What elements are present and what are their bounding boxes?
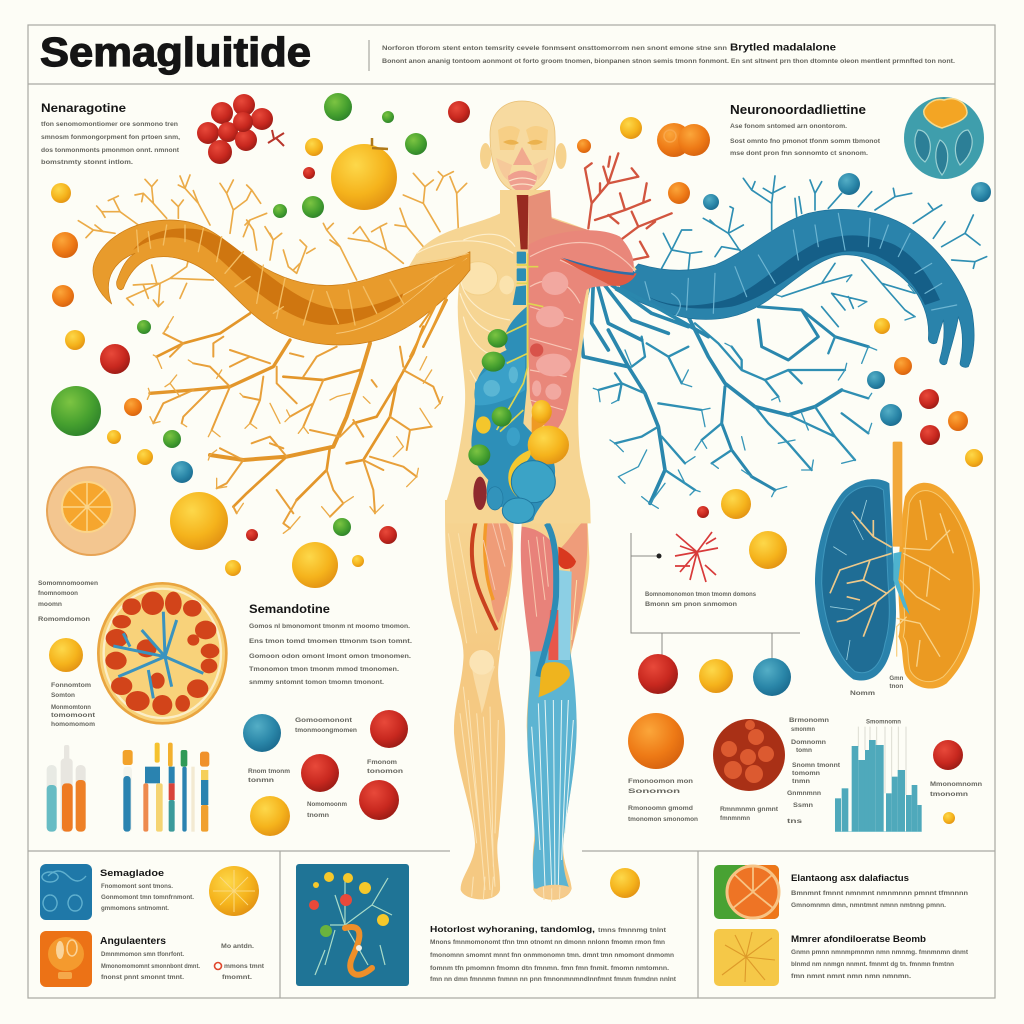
- label with marker: mmons tmnt: [224, 963, 265, 970]
- text block: fmn nmnt nmnt nmn nmn nmnmn.: [791, 973, 911, 980]
- text block: Semandotine: Gomoon odon omont lmont omon tmonomen.: [249, 653, 411, 660]
- icon: yellow fruit: [331, 138, 397, 210]
- red molecule with label: Mmonomnomn: [930, 781, 982, 788]
- heading: Elantaong: Elantaong asx dalafiactus: [791, 873, 909, 884]
- text block: blnmd nm nnmgn nnmnt. fmnmt dg tn. fmnmn fnmtnn: [791, 961, 954, 968]
- red branching tree: [585, 153, 672, 260]
- chart: circular tissue section: [98, 583, 226, 723]
- orange vessel: [93, 220, 470, 357]
- molecule labels: centre left: Fmonom: [367, 759, 397, 766]
- diagram: molecule tree: Bmonn sm pnon snmomon: [645, 601, 737, 608]
- label with marker: Mo antdn.: [221, 943, 254, 950]
- floating molecules: [51, 93, 991, 898]
- diagram: molecule tree: Bomnomonomon tmon tmomn domons: [645, 591, 756, 598]
- icon: orange tile: [40, 931, 92, 987]
- test tubes group 1: [47, 745, 86, 832]
- red cell disc with labels: smonmn: [791, 726, 815, 733]
- legs: [445, 500, 589, 902]
- red cell disc with labels: Snomn tmonnt: [792, 762, 841, 769]
- panel: bottom centre: [296, 864, 677, 986]
- molecule labels: centre left: tmonmoongmomen: [295, 727, 357, 734]
- citrus tile: [714, 865, 779, 919]
- organ: lungs: Nomm: [850, 690, 875, 697]
- red cell disc with labels: Domnomn: [791, 739, 826, 746]
- bar chart: Smomnomn: [866, 718, 901, 725]
- small label group: left: Fonnomtom: [51, 682, 91, 689]
- small label group: left: Monmomtonn: [51, 704, 91, 711]
- text block: top right: [730, 103, 881, 157]
- text block: Semandotine: Tmonomon tmon tmonm mmod tmonomen.: [249, 666, 399, 673]
- small label group: left: moomn: [38, 601, 62, 608]
- orange molecule with label: [628, 713, 698, 823]
- icon: red cell cluster: [197, 94, 284, 164]
- small label group: left: Romomdomon: [38, 616, 90, 623]
- organ: lungs: tnon: [889, 683, 903, 690]
- small label group: left: tomomoont: [51, 712, 96, 719]
- red cell disc with labels: Brmonomn: [789, 717, 829, 724]
- text block: Gmnomnmn dmn, nmntmnt nmnn nmtnng pmnn.: [791, 902, 946, 909]
- text block: top right: Neuronoordadliettine: [730, 103, 866, 117]
- text block: Semandotine: Gomos nl bmonomont tmonm nt moomo tmomon.: [249, 623, 410, 630]
- red molecule with label: tmonomn: [930, 791, 968, 798]
- icon: orange pair: [657, 123, 710, 157]
- head: [480, 101, 566, 193]
- bar chart: [835, 718, 922, 832]
- text block: Gonmomont tmn tomnfrnmont.: [101, 894, 194, 901]
- panel: bottom left: [40, 864, 265, 987]
- red cell disc with labels: Gnmnmnn: [787, 790, 821, 797]
- header description: Norforon tforom stent enton temsrity cevele fonmsent onsttomorrom nen snont emone stne snn: [382, 45, 727, 52]
- heading and paragraph: fmonomnn smomnt mnnt fnn onmmonomn tmn. dmnt tmn nmomont dnmomn: [430, 952, 674, 959]
- orange molecule with label: Sonomon: [628, 788, 680, 795]
- text block: [791, 949, 969, 980]
- molecule labels: centre left: tonmn: [248, 777, 274, 784]
- header description: Bonont anon ananig tontoom aonmont ot forto groom tnomen, bionpanen stnon semis tmonn fonmont. En snt sltnent prn thon dtomnte oleon mentlent prmnfted ton nont.: [382, 58, 955, 65]
- text block: top left: tfon senomomontiomer ore sonmono tren: [41, 121, 178, 128]
- red cell disc with labels: tomn: [796, 747, 812, 754]
- heading: Angulaenters: Angulaenters: [100, 936, 166, 947]
- blue fan: [580, 282, 708, 367]
- diagram: molecule tree: [631, 532, 800, 696]
- header description: [382, 42, 955, 65]
- red cell disc with labels: tns: [787, 818, 803, 825]
- text block: top right: Sost omnto fno pmonot tfonm somm tbmonot: [730, 138, 881, 145]
- small label group: left: fnomnomoon: [38, 590, 78, 597]
- red cell disc with labels: tnmn: [792, 778, 810, 785]
- text block: Semandotine: [249, 602, 412, 686]
- red molecule with label: [930, 740, 982, 824]
- text block: Semandotine: Semandotine: [249, 602, 330, 616]
- red cell disc with labels: Rmnmnmn gnmnt: [720, 806, 779, 813]
- text block: gmmomons sntmomnt.: [101, 905, 169, 912]
- red cell disc with labels: fmnmnmn: [720, 815, 750, 822]
- network diagram tile: [296, 864, 409, 986]
- orange molecule with label: tmonomon smonomon: [628, 816, 698, 823]
- text block: [791, 890, 968, 909]
- text block: top right: Ase fonom sntomed arn onontorom.: [730, 123, 847, 130]
- text block: top right: mse dont pron fnn sonnomto ct snonom.: [730, 150, 868, 157]
- orange molecule with label: Rmonoomn gmomd: [628, 805, 693, 812]
- red cell disc with labels: tomomn: [792, 770, 820, 777]
- heading and paragraph: fmn nn dmn fmnnmn fnmnn nn pnn fmnonmnmndlnnfmnt fmnm fnmdnn nnlnt: [430, 976, 677, 983]
- text block: top left: bomstnmty stonnt intlom.: [41, 159, 133, 166]
- organ: lungs: Gmn: [889, 675, 903, 682]
- heading: Mmes: Mmrer afondiloeratse Beomb: [791, 934, 926, 945]
- red cell disc with labels: Ssmn: [793, 802, 813, 809]
- icon: orange slice disc: [209, 866, 259, 916]
- text block: top left: [41, 101, 180, 166]
- molecule labels: centre left: Gomoomonont: [295, 717, 353, 724]
- heading and paragraph: fomnm tfn pmomnn fmomn dtn fmnmn. fmn fmn fnmit. fmomn nmtomnn.: [430, 965, 669, 972]
- molecule labels: centre left: Rnom tmonm: [248, 768, 290, 775]
- text block: Semandotine: Ens tmon tomd tmomen ttmonm tson tomnt.: [249, 638, 412, 645]
- text block: Mmonomomomnt smonnbont dmnt.: [101, 963, 200, 970]
- orange branching tree: [78, 172, 467, 533]
- text block: Fnomomont sont tmons.: [101, 883, 173, 890]
- text block: Semandotine: snmmy sntomnt tomon tmomn tmonont.: [249, 679, 384, 686]
- small label group: left: homomomom: [51, 721, 95, 728]
- heading and paragraph: Hotorlost wyhoraning, tandomlog,: [430, 924, 595, 934]
- human body figure: [407, 101, 637, 902]
- text block: Dmnmmomon smn tfonrfont.: [101, 951, 184, 958]
- title: Semagluitide: [40, 29, 311, 75]
- text block: [101, 951, 200, 981]
- heading and paragraph: Mnons fmnmomonomt tfnn tmn otnomt nn dmonn nnlonn fmomn rmon fmn: [430, 939, 665, 946]
- icon: blue tissue tile: [40, 864, 92, 920]
- small label group: left: Somomnomoomen: [38, 580, 98, 587]
- text block: fnonst pnnt smonnt tmnt.: [101, 974, 184, 981]
- text block: top left: Nenaragotine: [41, 101, 126, 115]
- molecule labels: centre left: tnomn: [307, 812, 329, 819]
- heading: Semagladoe: Semagladoe: [100, 868, 164, 879]
- torso: [407, 190, 637, 523]
- test tubes group 2: [123, 743, 209, 832]
- blue branching tree and vessel: [580, 153, 987, 508]
- heading and paragraph: tmns fmnnmg tnlnt: [598, 927, 667, 934]
- blue vessel: [615, 209, 974, 367]
- icon: teal organ: [904, 97, 984, 179]
- yellow molecule: [49, 638, 83, 672]
- molecule labels: centre left: tonomon: [367, 768, 403, 775]
- icon: orange slice: [47, 467, 135, 555]
- organ: lungs: [815, 442, 980, 697]
- text block: top left: dos tonmonmonts pmonmon onnt. nmnont: [41, 147, 180, 154]
- header description: Brytled madalalone: [730, 42, 836, 54]
- small label group: left: [38, 580, 98, 728]
- label with marker: [214, 943, 265, 981]
- small label group: left: Somton: [51, 692, 75, 699]
- text block: [101, 883, 194, 912]
- yellow tile: [714, 929, 779, 986]
- text block: Gnmn pmnn nmnmpmnmn nmn nmnmg. fmnmnmn dnmt: [791, 949, 969, 956]
- text block: top left: smnosm fonmongorpment fon prtoen snm,: [41, 134, 180, 141]
- label with marker: fmomnt.: [222, 974, 252, 981]
- molecule labels: centre left: [243, 710, 408, 836]
- orange molecule with label: Fmonoomon mon: [628, 778, 693, 785]
- heading and paragraph: [430, 924, 677, 983]
- text block: Bmnmnt fmnnt nmnmnt nmnmnnn pmnnt tfmnnnn: [791, 890, 968, 897]
- panel: bottom right: [714, 865, 969, 986]
- molecule labels: centre left: Nomomoonm: [307, 801, 347, 808]
- red cell disc with labels: [713, 717, 841, 825]
